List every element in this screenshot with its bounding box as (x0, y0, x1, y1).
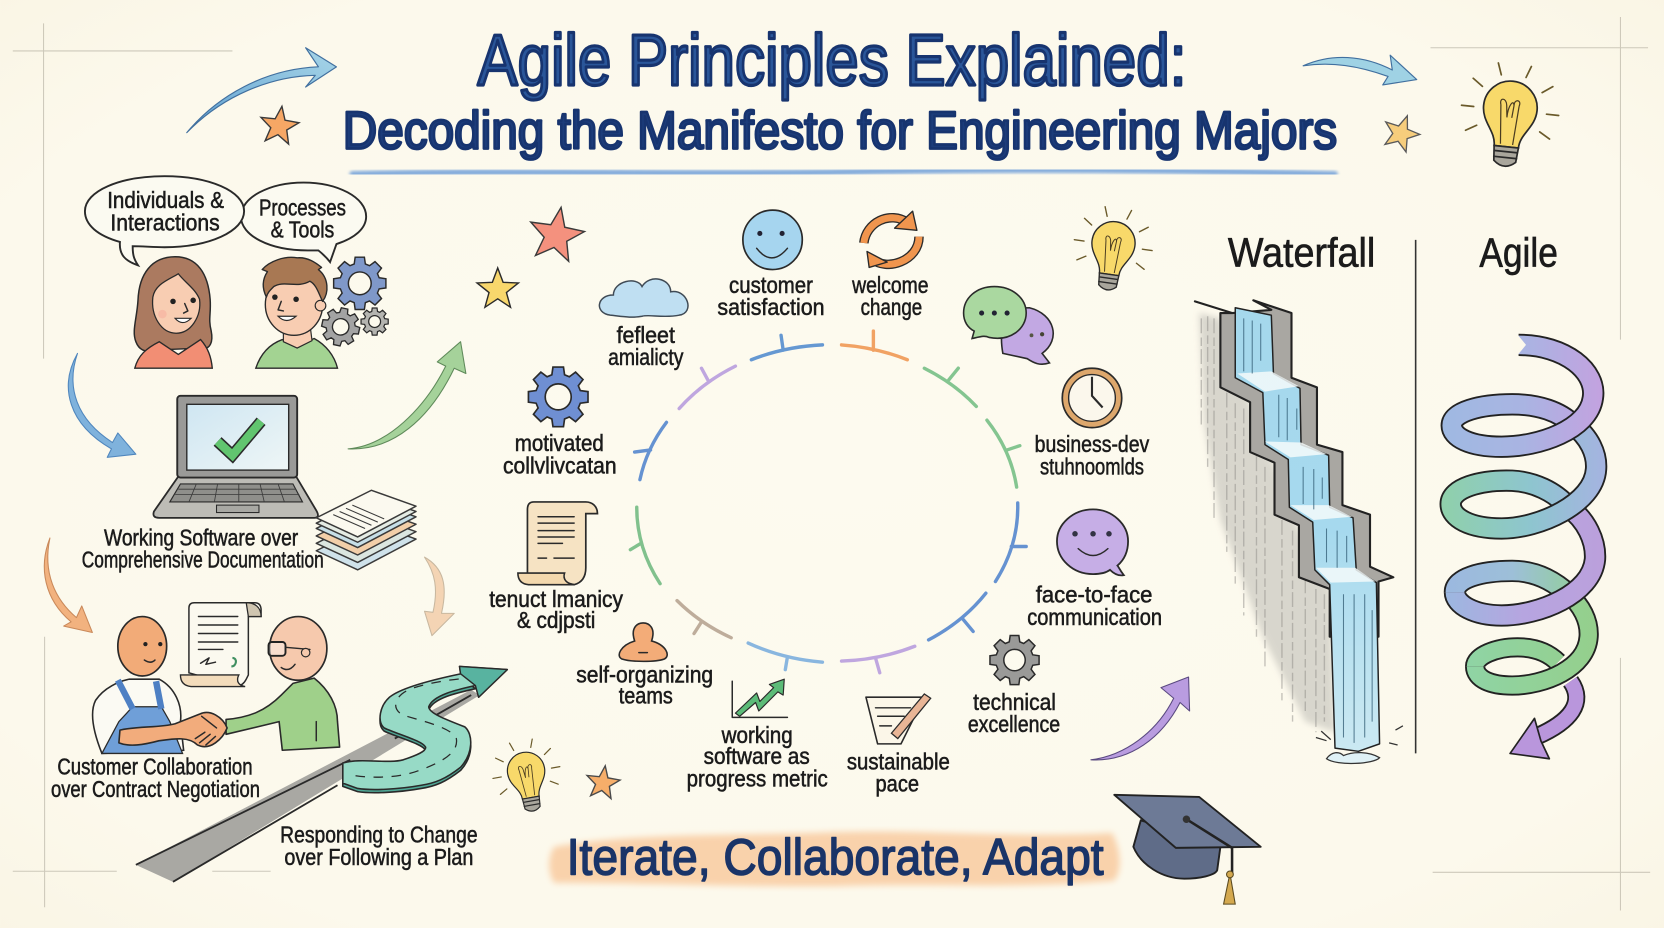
principle: technical excellence: technical (973, 689, 1056, 715)
principle: contract tenancy (489, 502, 623, 633)
icon: scroll (518, 502, 597, 585)
icon: grey gear (990, 635, 1039, 685)
label: customer collaboration: over Contract Negotiation (51, 776, 260, 802)
star: yellow (477, 268, 518, 307)
icon: sync arrows (864, 211, 919, 267)
arrow: blue curving to laptop (68, 353, 136, 457)
panel: customer collaboration (51, 603, 340, 802)
label: working software: Comprehensive Documentation (82, 547, 324, 573)
waterfall stairs (1195, 300, 1393, 637)
principle: face-to-face: face-to-face (1036, 582, 1152, 608)
principle: sustainable pace (847, 694, 950, 797)
label: customer collaboration: Customer Collaboration (57, 754, 253, 780)
icon: laptop (153, 396, 318, 518)
principle: self-organizing teams: self-organizing (576, 661, 713, 687)
icon: clock (1062, 368, 1122, 428)
waterfall shading (1199, 313, 1335, 732)
title line 1: Agile Principles Explained: (478, 21, 1186, 101)
arrow: purple rising (1091, 677, 1190, 760)
icon: blue gear (528, 367, 588, 427)
label: responding to change: over Following a Plan (284, 844, 473, 870)
speech bubble: individuals and interactions (85, 176, 244, 265)
panel: responding to change (136, 666, 507, 882)
principle: working software metric: software as (704, 743, 810, 769)
panel: working software (82, 396, 416, 573)
label: responding to change: Responding to Change (280, 822, 478, 848)
waterfall water (1235, 308, 1380, 751)
principle: customer satisfaction (717, 210, 825, 320)
icon: bulb bottom (487, 735, 567, 817)
icon: contract scroll (180, 603, 261, 687)
principle: contract tenancy: & cdjpsti (517, 607, 595, 633)
principle: motivated (503, 367, 617, 478)
icon: mid bulb (1068, 203, 1157, 295)
slogan text: Iterate, Collaborate, Adapt (567, 828, 1104, 885)
icon: rising chart (732, 679, 787, 717)
speech bubble: individuals and interactions: Individuals & (107, 187, 224, 213)
principle: welcome change (851, 211, 929, 320)
comparison divider (1415, 240, 1417, 753)
arrow: top left blue (187, 48, 336, 133)
icon: gears (318, 257, 388, 349)
panel: individuals and interactions (85, 176, 388, 368)
title underline (352, 170, 1335, 174)
principle: reflect (599, 279, 688, 370)
principle: business-dev (1035, 368, 1150, 479)
principle: self-organizing teams: teams (619, 683, 673, 709)
principle: motivated: collvlivcatan (503, 452, 617, 478)
arrow: peach down (425, 557, 454, 636)
icon: purple face (1057, 509, 1128, 575)
principle: face-to-face (1027, 509, 1162, 630)
principle: working software metric: progress metric (687, 765, 828, 791)
principle: welcome change: welcome (851, 272, 929, 298)
title (343, 21, 1337, 174)
arrow: green rising (348, 342, 466, 449)
spiral tube (1451, 333, 1596, 759)
label: responding to change (280, 822, 478, 870)
icon: graduation cap (1114, 795, 1261, 904)
figure: man left (92, 617, 227, 753)
arrow: top right blue (1303, 55, 1417, 85)
slogan (549, 828, 1120, 886)
principle: contract tenancy: tenuct lmanicy (489, 586, 623, 612)
star: orange bottom (584, 763, 622, 799)
principle: reflect: fefleet (617, 322, 676, 348)
label: working software: Working Software over (104, 524, 299, 550)
principle: customer satisfaction: customer (729, 272, 813, 298)
arrow: orange down (44, 538, 92, 632)
speech bubble: processes and tools (241, 183, 366, 262)
principle: technical excellence (968, 635, 1060, 737)
heading: agile: Agile (1479, 229, 1558, 275)
speech bubble: processes and tools: Processes (259, 194, 346, 220)
principle: business-dev: business-dev (1035, 431, 1150, 457)
waterfall splash (1316, 726, 1403, 763)
principle: technical excellence: excellence (968, 711, 1060, 737)
icon: bulb top right (1456, 60, 1563, 171)
panel: agile (1451, 229, 1596, 759)
principle: face-to-face: communication (1027, 604, 1162, 630)
principle: self-organizing teams (576, 623, 713, 709)
panel: waterfall (1195, 229, 1403, 763)
principle: reflect: amialicty (608, 344, 684, 370)
principle: welcome change: change (861, 294, 922, 320)
title line 2: Decoding the Manifesto for Engineering Majors (343, 102, 1337, 161)
principle: sustainable pace: pace (876, 771, 919, 797)
figure: girl (134, 257, 212, 368)
heading: waterfall: Waterfall (1228, 229, 1375, 275)
icon: document stack (316, 490, 416, 570)
figure: boy (256, 257, 337, 368)
principle: customer satisfaction: satisfaction (717, 294, 825, 320)
label: customer collaboration (51, 754, 260, 802)
principle: working software metric (687, 679, 828, 791)
speech bubble: processes and tools: & Tools (271, 217, 334, 243)
icon: chat bubbles (964, 287, 1053, 364)
star: gold top right (1378, 110, 1424, 154)
label: working software (82, 524, 324, 573)
icon: cloud (599, 279, 688, 317)
slogan brush band (549, 832, 1120, 886)
principle: sustainable pace: sustainable (847, 748, 950, 774)
principle: motivated: motivated (515, 430, 604, 456)
speech bubble: individuals and interactions: Interactions (110, 209, 220, 235)
road: winding green path (343, 666, 507, 793)
principle: business-dev: stuhnoomlds (1040, 453, 1144, 479)
star: orange top (258, 104, 301, 145)
star: red (525, 203, 588, 263)
road: straight plan (136, 690, 480, 882)
icon: smile (743, 210, 802, 270)
principle: working software metric: working (721, 722, 793, 748)
icon: notepad and pencil (866, 694, 931, 744)
figure: man right (226, 617, 340, 750)
icon: person blob (619, 623, 667, 661)
circular principles ring (630, 331, 1026, 673)
